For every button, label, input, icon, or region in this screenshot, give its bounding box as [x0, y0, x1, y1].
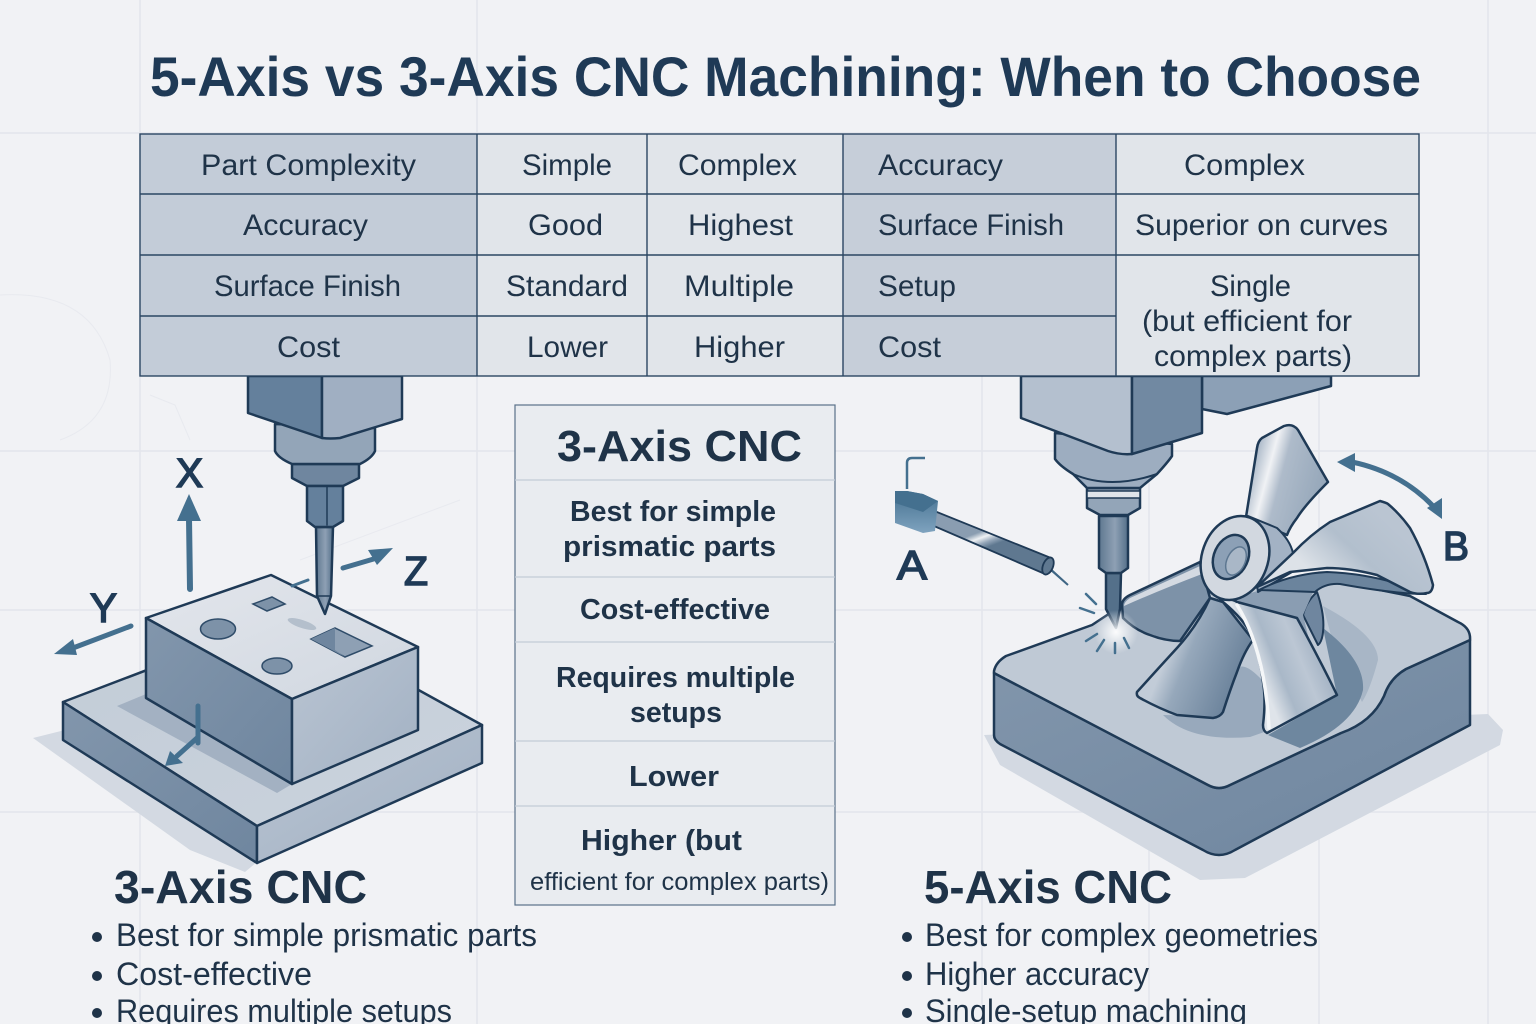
row: cost: Lower [527, 331, 608, 364]
heading: 3-axis CNC: 3-Axis CNC [114, 861, 367, 913]
panel row: best for [563, 496, 776, 563]
machined base [994, 580, 1470, 855]
row: surface finish: Standard [506, 270, 628, 303]
sparks [1080, 594, 1129, 653]
panel row: best for: prismatic parts [563, 531, 776, 563]
hub [1189, 506, 1281, 610]
panel row: lower: Lower [629, 761, 719, 793]
list: 3-axis benefits: Best for simple prismatic parts [116, 917, 537, 953]
ground shadow [33, 730, 257, 872]
row: part complexity: Part Complexity [201, 149, 416, 182]
row: cost: Higher [694, 331, 785, 364]
row: accuracy [243, 209, 1388, 242]
blade: left [1122, 562, 1210, 641]
rear cylinder [1303, 592, 1323, 645]
row: surface finish: Surface Finish [214, 270, 401, 303]
label: Z: Z [404, 548, 428, 594]
list: 5-axis benefits: Best for complex geometries [925, 917, 1318, 953]
machined features [200, 597, 372, 674]
row: accuracy: Good [528, 209, 603, 242]
illustration: 3-axis CNC machine [33, 376, 482, 872]
label: Y: Y [90, 585, 117, 631]
table cell backgrounds [140, 134, 1419, 376]
hub barrel [1248, 516, 1293, 592]
arrow: B rotation [1337, 453, 1442, 519]
comparison table [140, 134, 1419, 376]
label: B: B [1443, 523, 1469, 569]
label: X: X [176, 450, 203, 496]
panel row: higher [530, 825, 829, 896]
row: surface finish: (but efficient for [1142, 305, 1352, 338]
heading: 5-axis CNC: 5-Axis CNC [924, 861, 1172, 913]
panel row: setups: setups [630, 697, 722, 729]
row: part complexity [201, 149, 1305, 182]
ground shadow [984, 714, 1503, 880]
spindle [1021, 376, 1331, 628]
arrow: Y [54, 626, 131, 655]
row: part complexity: Accuracy [878, 149, 1003, 182]
arrow: Z [343, 548, 393, 568]
row: surface finish: Setup [878, 270, 956, 303]
base plate [63, 617, 482, 863]
row: cost: Cost [277, 331, 341, 364]
row: accuracy: Superior on curves [1135, 209, 1388, 242]
glow [1094, 610, 1138, 654]
illustration: 5-axis CNC machine [895, 376, 1503, 880]
row: cost: Cost [878, 331, 942, 364]
list: 5-axis benefits: Higher accuracy [925, 956, 1149, 992]
label: A: A [897, 542, 928, 588]
list: 5-axis benefits [902, 917, 1318, 1024]
row: accuracy: Highest [688, 209, 794, 242]
row: accuracy: Surface Finish [878, 209, 1064, 242]
arrow: feed [165, 706, 198, 766]
row: surface finish: Single [1210, 270, 1291, 303]
arrow: X [177, 494, 201, 589]
row: part complexity: Complex [678, 149, 797, 182]
panel row: higher: efficient for complex parts) [530, 868, 829, 896]
row: cost [277, 331, 942, 364]
workpiece block [146, 575, 418, 784]
panel row: cost-effective: Cost-effective [580, 594, 770, 626]
probe tool [895, 458, 1068, 585]
list: 3-axis benefits [92, 917, 537, 1024]
blade: right [1259, 572, 1426, 594]
row: part complexity: Simple [522, 149, 612, 182]
turbine blades [1122, 425, 1433, 733]
blade: lower right [1220, 599, 1337, 733]
spindle [248, 376, 402, 614]
row: surface finish: Multiple [684, 270, 794, 303]
row: surface finish [214, 270, 1352, 373]
row: surface finish: complex parts) [1154, 340, 1352, 373]
blade: lower left [1137, 598, 1253, 718]
panel heading: 3-Axis CNC [557, 422, 802, 471]
panel row: best for: Best for simple [570, 496, 776, 528]
row: accuracy: Accuracy [243, 209, 368, 242]
row: part complexity: Complex [1184, 149, 1305, 182]
title: 5-Axis vs 3-Axis CNC Machining: When to Choose [150, 45, 1421, 108]
table grid [140, 134, 1419, 376]
panel: center 3-axis summary [515, 405, 835, 905]
recess shadows [1163, 606, 1378, 748]
list: 3-axis benefits: Cost-effective [116, 956, 312, 992]
panel row: higher: Higher (but [581, 825, 742, 857]
panel row: setups: Requires multiple [556, 662, 795, 694]
blade: top [1246, 425, 1328, 535]
panel row: setups [556, 662, 795, 729]
